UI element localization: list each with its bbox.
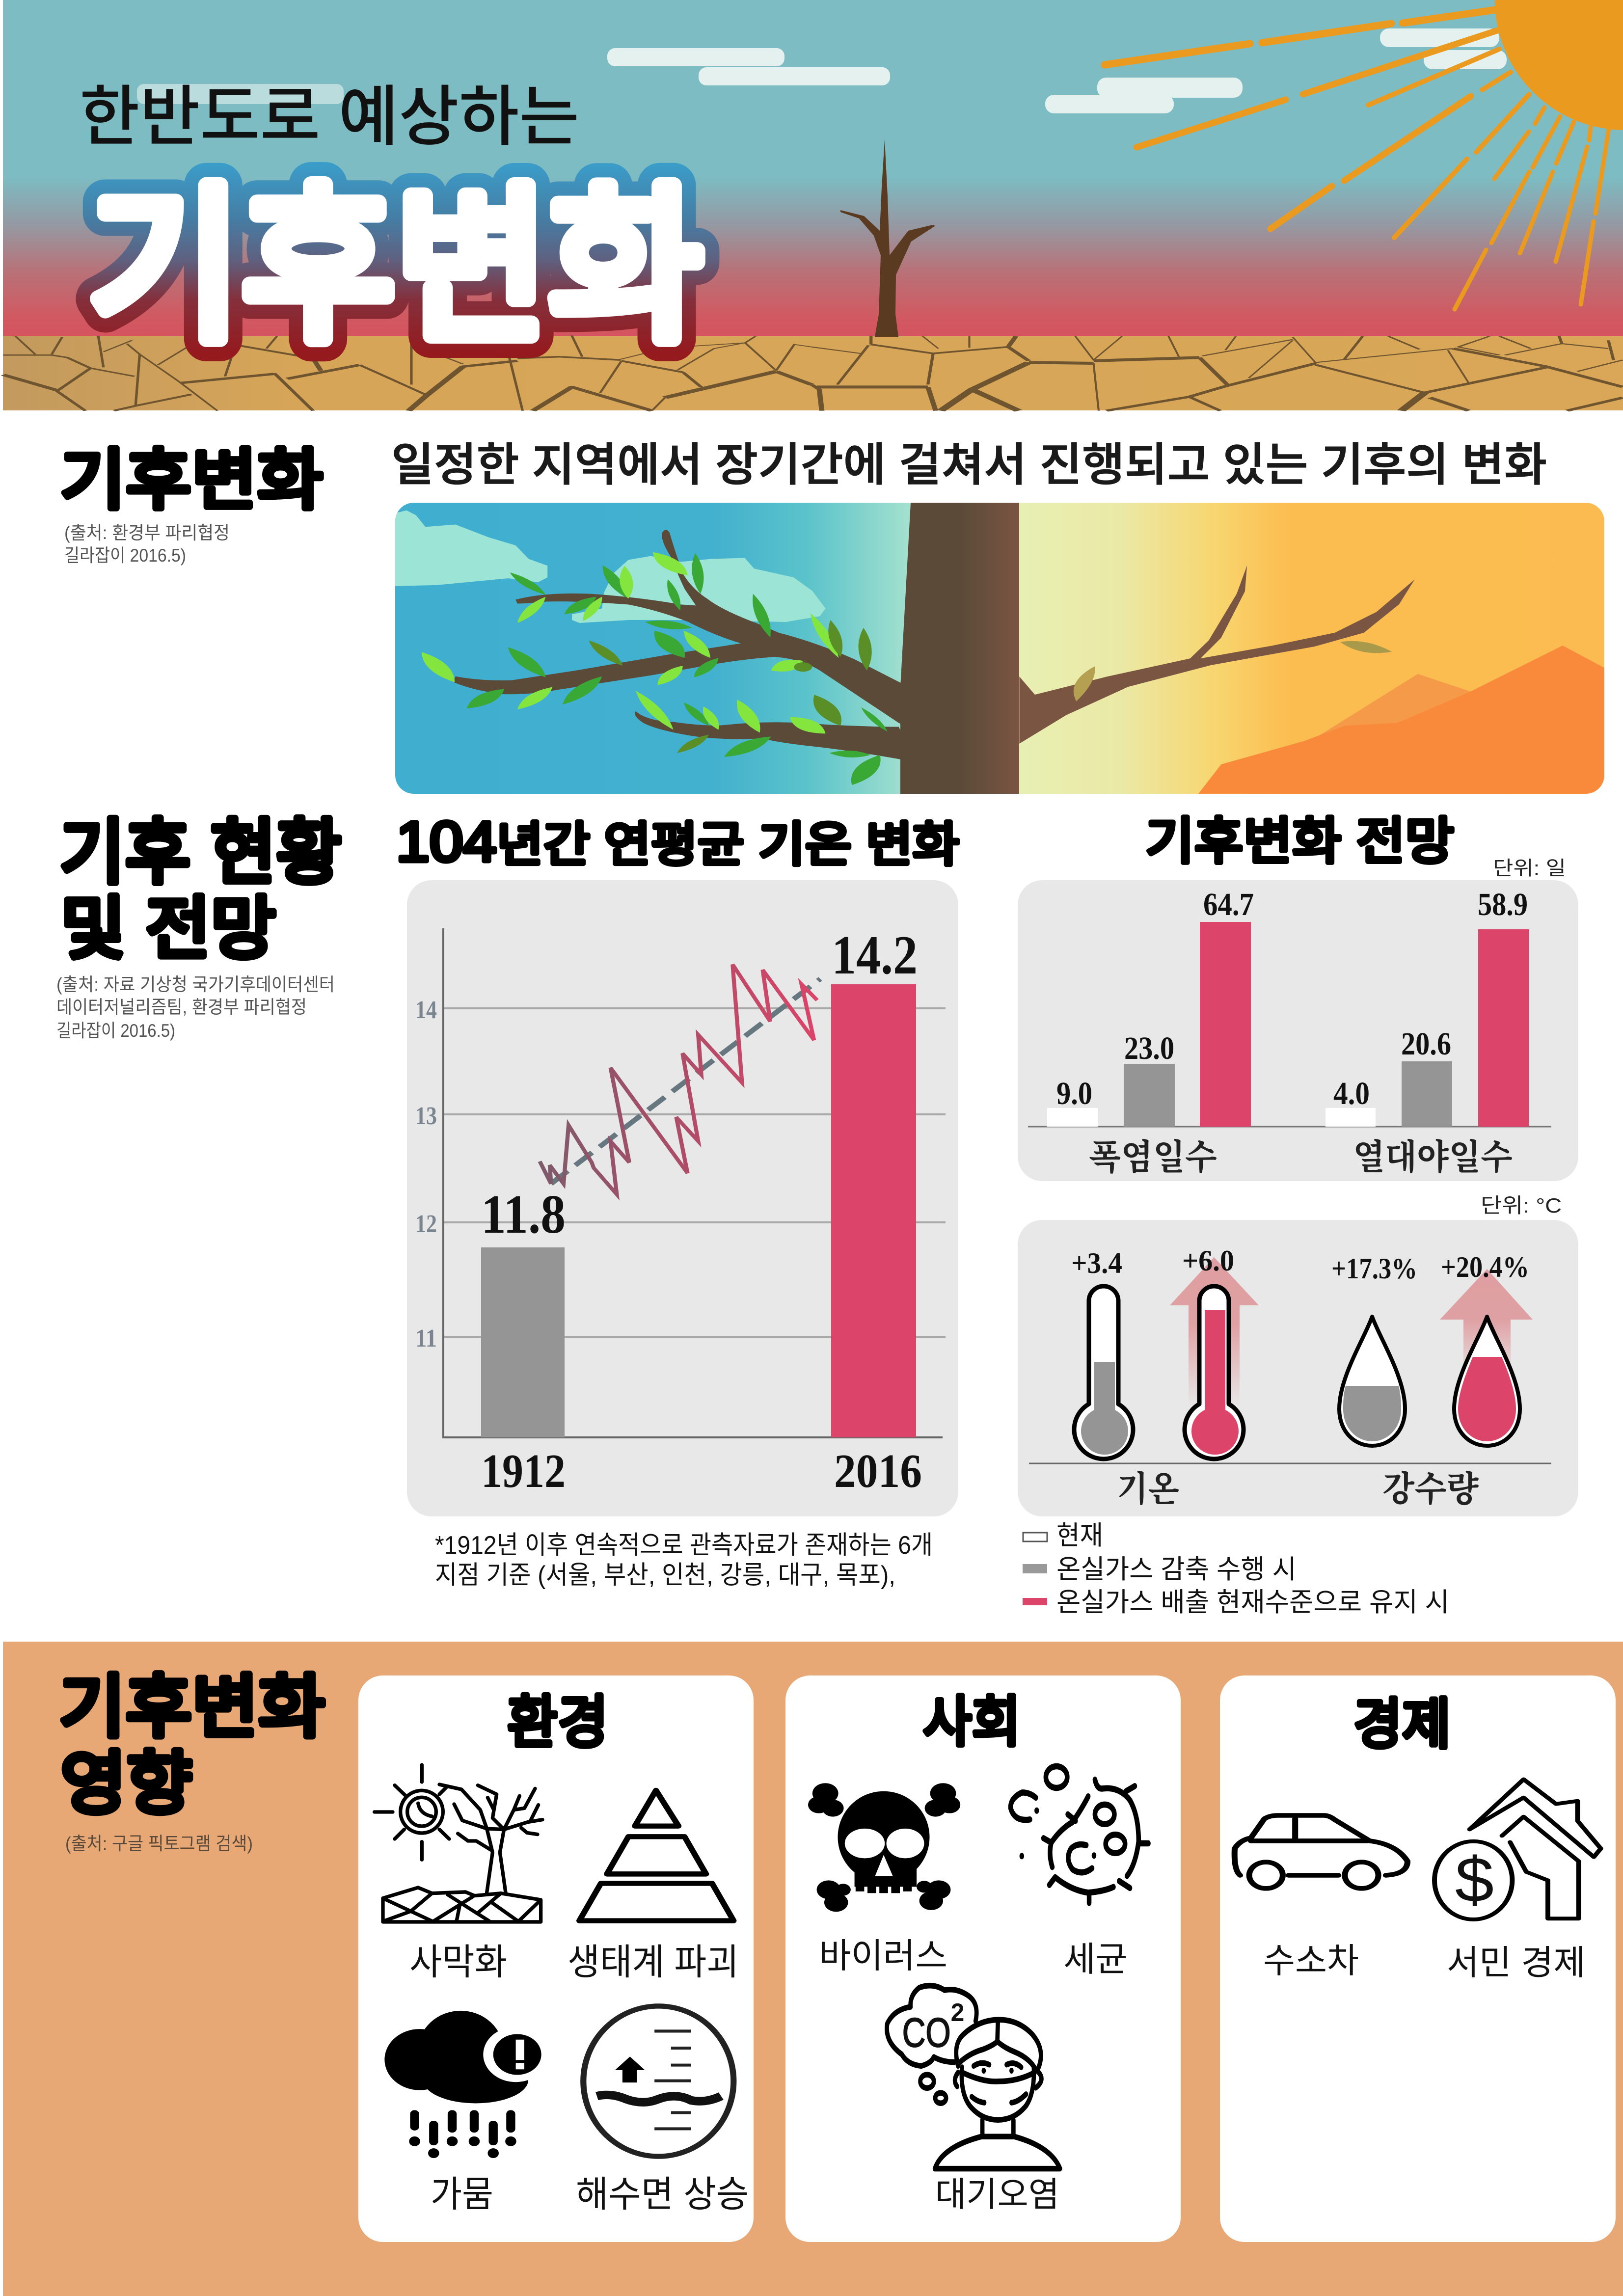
panel: environment	[358, 1675, 754, 2242]
labels: society: 세균	[1063, 1940, 1128, 1978]
bar values: 23.0	[1124, 1030, 1174, 1066]
category labels: 강수량	[1382, 1470, 1479, 1509]
labels: environment: 사막화	[409, 1942, 507, 1982]
y axis labels: 11	[415, 1324, 437, 1352]
legend: reduction: 온실가스 감축 수행 시	[1056, 1555, 1297, 1584]
source note 3: (출처: 구글 픽토그램 검색)	[65, 1834, 253, 1854]
footnote	[435, 1531, 933, 1590]
section heading: 기후 현황 및 전망	[59, 812, 342, 967]
footnote: *1912년 이후 연속적으로 관측자료가 존재하는 6개	[435, 1531, 933, 1560]
category labels: 열대야일수	[1353, 1138, 1513, 1177]
panel: heatwave and tropical nights bars	[1018, 880, 1578, 1181]
banner: climate change header scene	[3, 0, 1623, 411]
labels: environment: 가뭄	[431, 2174, 493, 2215]
value 14.2: 14.2	[832, 925, 918, 986]
source note 2	[56, 974, 335, 1041]
bar 1912	[481, 1247, 565, 1437]
dry branch	[1019, 566, 1415, 744]
icon: skull and crossbones	[808, 1783, 960, 1912]
value 11.8: 11.8	[481, 1184, 566, 1245]
section heading: 기후변화 영향: 영향	[60, 1745, 192, 1822]
bar values: 4.0	[1333, 1076, 1370, 1111]
year 1912: 1912	[481, 1445, 566, 1498]
icon: sea level rise	[583, 2006, 733, 2157]
labels: society: 바이러스	[819, 1937, 947, 1975]
legend: current emission level: 온실가스 배출 현재수준으로 유지 시	[1056, 1588, 1449, 1617]
labels: economy: 서민 경제	[1447, 1944, 1586, 1982]
bar values: 20.6	[1401, 1026, 1451, 1062]
category labels	[1089, 1138, 1513, 1177]
icon: drought cloud	[384, 2011, 548, 2154]
clouds	[137, 28, 1507, 113]
bars: 열대야일수	[1325, 929, 1529, 1127]
icon: person with mask and CO2: 2	[951, 1998, 964, 2026]
values: +6.0	[1182, 1244, 1234, 1277]
heading: 104 years temperature: 104년간 연평균 기온 변화	[396, 810, 959, 873]
category labels: 폭염일수	[1089, 1138, 1217, 1177]
dead tree	[840, 139, 935, 337]
labels: environment	[409, 1942, 749, 2215]
category labels	[1117, 1470, 1479, 1509]
sky gradient background	[395, 503, 1604, 794]
bar 2016	[831, 984, 916, 1437]
panel: annual mean temperature chart	[407, 880, 958, 1516]
values	[1071, 1244, 1529, 1285]
section heading: 기후변화 영향	[59, 1668, 325, 1822]
arrow behind thermometer	[1170, 1257, 1259, 1407]
drop: grey	[1339, 1317, 1405, 1446]
source note 2: (출처: 자료 기상청 국가기후데이터센터	[56, 974, 335, 995]
panel: society	[785, 1675, 1181, 2242]
labels: economy: 수소차	[1263, 1942, 1359, 1980]
drop: red	[1454, 1317, 1520, 1446]
heading: society: 사회	[923, 1691, 1021, 1753]
legend	[1023, 1521, 1449, 1617]
unit label: celsius: 단위: °C	[1481, 1194, 1562, 1217]
heading: economy: 경제	[1353, 1694, 1451, 1755]
labels: environment: 생태계 파괴	[568, 1942, 739, 1982]
source note 2: 길라잡이 2016.5)	[56, 1021, 175, 1041]
section heading: 기후변화: 기후변화	[60, 443, 323, 517]
labels: society: 대기오염	[935, 2175, 1059, 2214]
mountains	[1198, 646, 1606, 794]
labels: society	[819, 1937, 1128, 2214]
bar values: 64.7	[1203, 887, 1254, 922]
panel: economy	[1220, 1675, 1616, 2242]
baseline	[1029, 1463, 1551, 1464]
y axis labels: 14	[415, 996, 437, 1024]
heading: environment: 환경	[507, 1690, 608, 1755]
trend and fluctuation lines	[540, 965, 820, 1194]
icon: person with mask and CO2	[887, 1986, 1060, 2169]
definition text: 일정한 지역에서 장기간에 걸쳐서 진행되고 있는 기후의 변화	[391, 439, 1547, 490]
labels: economy	[1263, 1942, 1586, 1982]
legend: current	[1023, 1521, 1103, 1550]
values: +17.3%	[1331, 1252, 1417, 1285]
values: +20.4%	[1441, 1251, 1529, 1283]
trunk	[900, 503, 1019, 794]
values: +3.4	[1071, 1247, 1122, 1279]
baseline	[1028, 1126, 1551, 1127]
sun with rays	[1105, 0, 1623, 309]
sky	[3, 0, 1623, 339]
icon: house with dollar: $	[1455, 1844, 1494, 1916]
legend: current: 현재	[1056, 1521, 1103, 1550]
bar values: 58.9	[1478, 887, 1528, 922]
bar values: 9.0	[1056, 1076, 1092, 1111]
panel: temperature and precipitation outlook	[1018, 1220, 1578, 1516]
green side clouds, branches and leaves	[395, 511, 914, 785]
source note 1	[64, 523, 230, 566]
subtitle: 한반도로 예상하는	[80, 81, 579, 154]
y axis labels: 13	[415, 1102, 437, 1130]
heading: climate outlook: 기후변화 전망	[1145, 813, 1454, 869]
y axis labels: 12	[415, 1210, 437, 1238]
icon: bacteria	[1010, 1766, 1148, 1903]
icon: person with mask and CO2: CO	[902, 2010, 951, 2055]
icon: ecosystem pyramid	[579, 1790, 733, 1921]
bars: 폭염일수	[1047, 922, 1251, 1127]
y axis labels	[415, 996, 437, 1352]
bar values	[1056, 887, 1528, 1111]
source note 1: 길라잡이 2016.5)	[64, 545, 186, 566]
year 2016: 2016	[834, 1445, 922, 1498]
source note 1: (출처: 환경부 파리협정	[64, 523, 230, 543]
grid lines and axes	[443, 928, 946, 1437]
cracked ground	[3, 335, 1623, 411]
icon: hydrogen car	[1235, 1815, 1407, 1889]
thermometer: red	[1185, 1286, 1244, 1459]
main title: 기후변화	[88, 173, 703, 362]
icon: desertification	[375, 1765, 542, 1922]
thermometer: grey	[1074, 1286, 1133, 1459]
arrow behind drop	[1440, 1269, 1533, 1380]
source note 2: 데이터저널리즘팀, 환경부 파리협정	[56, 997, 307, 1017]
illustration: half green half dry tree	[395, 503, 1606, 794]
icon: house with dollar	[1434, 1779, 1601, 1919]
main title: 기후변화	[88, 173, 703, 362]
labels: environment: 해수면 상승	[576, 2174, 749, 2215]
section heading: 기후변화 영향: 기후변화	[59, 1668, 325, 1746]
category labels: 기온	[1117, 1470, 1179, 1509]
footnote: 지점 기준 (서울, 부산, 인천, 강릉, 대구, 목포),	[435, 1561, 895, 1590]
section heading: 기후 현황 및 전망: 및 전망	[60, 890, 276, 967]
section: impacts background	[3, 1642, 1623, 2296]
unit label: days: 단위: 일	[1493, 858, 1566, 879]
section heading: 기후 현황 및 전망: 기후 현황	[59, 812, 342, 892]
